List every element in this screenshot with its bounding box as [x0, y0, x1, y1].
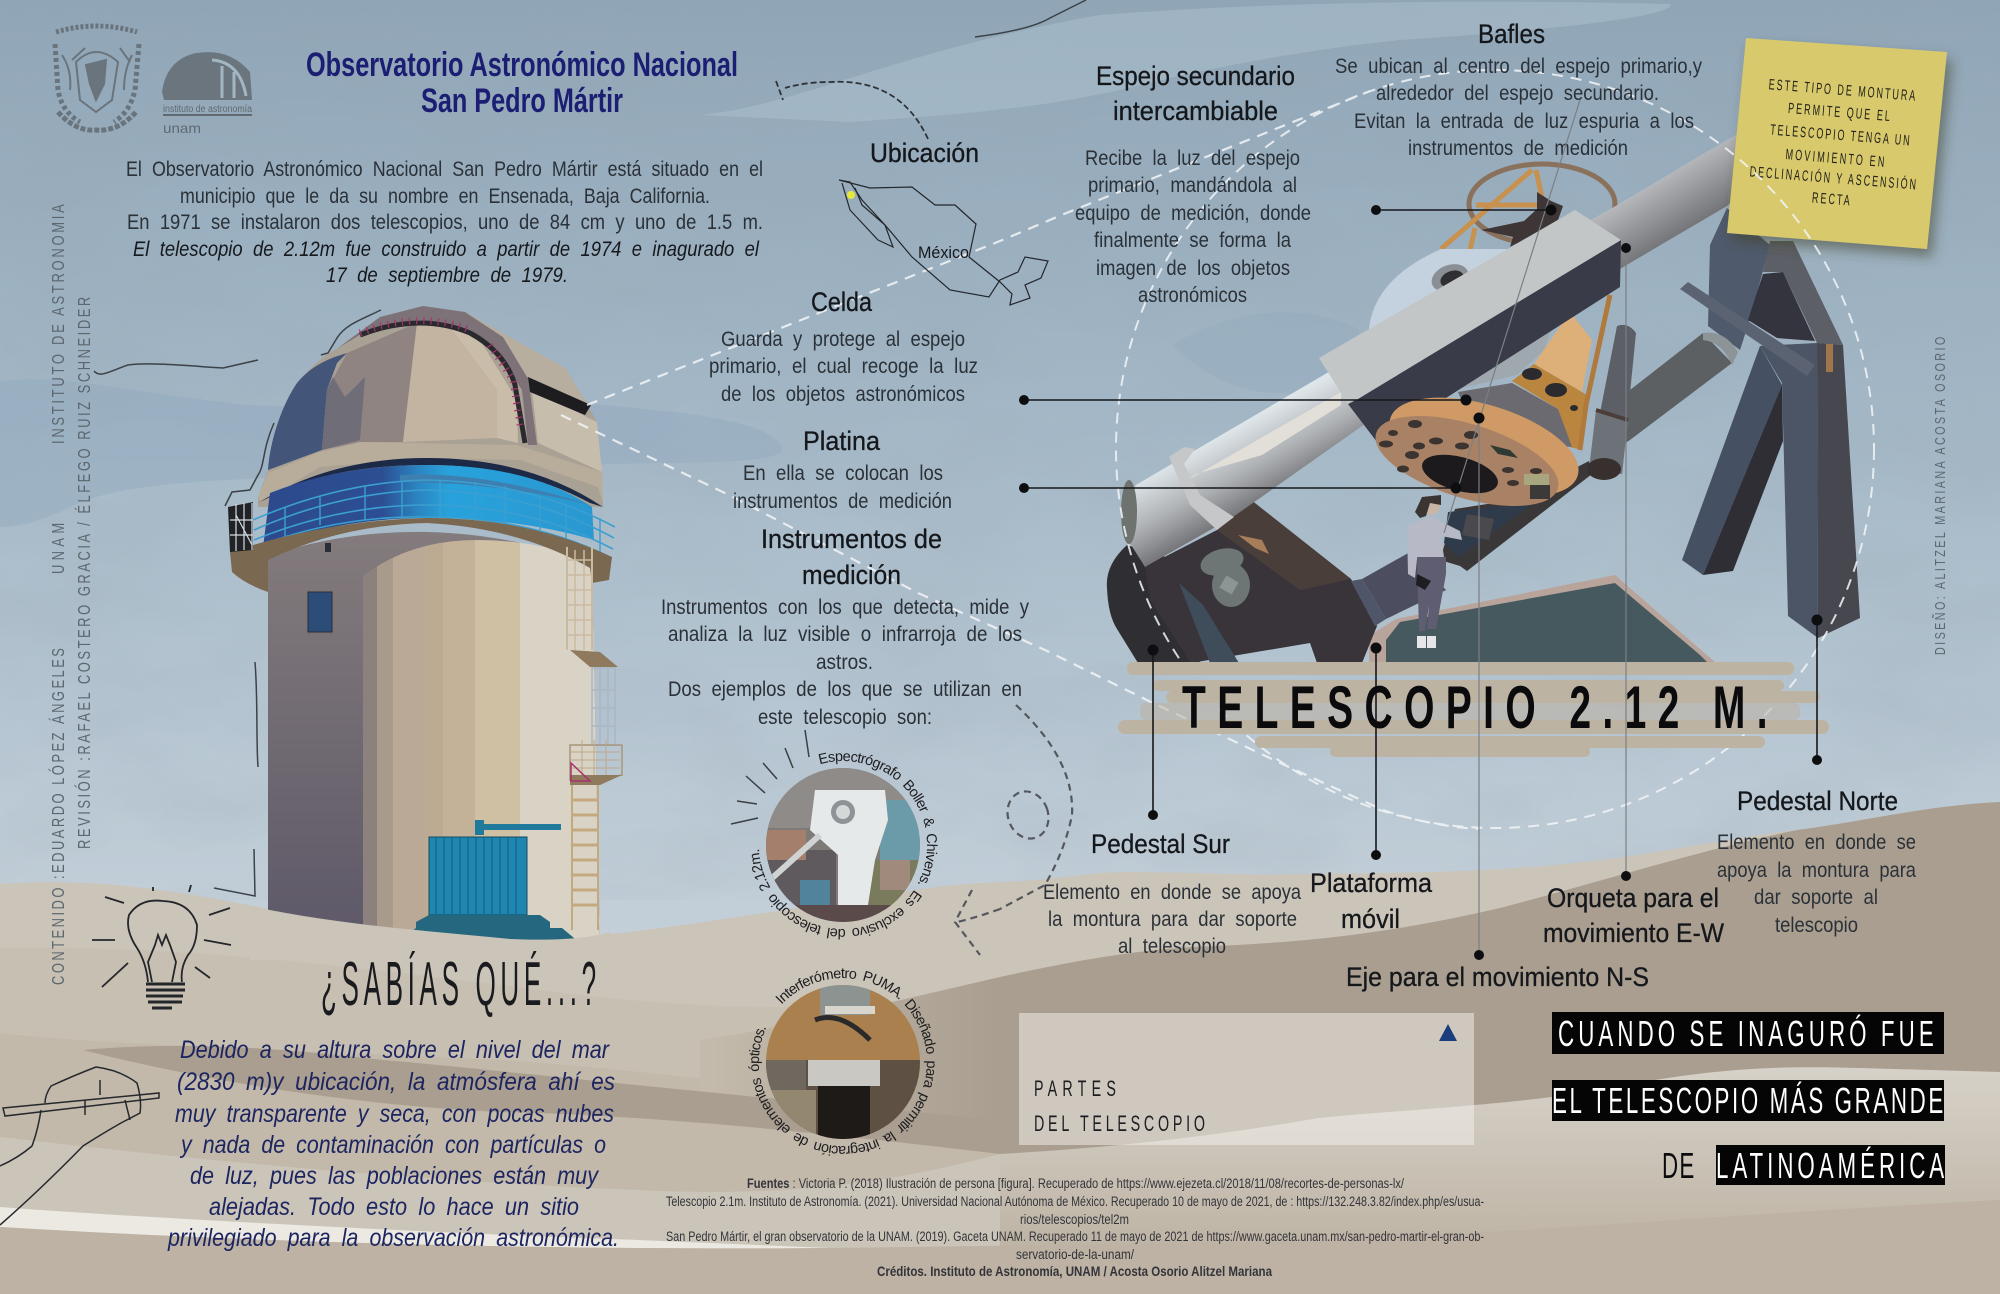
text: Pedestal Sur: Elemento en donde se apoya — [1043, 881, 1301, 904]
text: Instrumentos de medición: este telescopio son: — [758, 706, 932, 729]
callout: largest telescope: CUANDO SE INAGURÓ FUE — [1558, 1015, 1934, 1054]
dark deck — [1440, 461, 1592, 571]
vertical credits: DISEÑO: ALITZEL MARIANA ACOSTA OSORIO — [1931, 337, 1948, 655]
text: Instrumentos de medición: astros. — [816, 651, 873, 674]
south pedestal body — [1145, 500, 1377, 663]
mirror cell copper rim — [1378, 378, 1590, 516]
sources and credits: Telescopio 2.1m. Instituto de Astronomía. (2021). Universidad Nacional Autónoma de México. Recuperado 10 de mayo de 2021, de : https://132.248.3.82/index.php/es/usua- — [666, 1194, 1484, 1209]
text: Celda: Celda — [811, 287, 873, 317]
text: Orqueta — [1543, 883, 1724, 948]
note text: RECTA — [1811, 189, 1851, 209]
instrument: Espectrógrafo circle — [730, 730, 938, 940]
text: Espejo secundario: equipo de medición, donde — [1075, 202, 1311, 225]
text: Eje: Eje para el movimiento N-S — [1346, 962, 1649, 992]
text: Platina: En ella se colocan los — [743, 462, 943, 485]
text: Plataforma móvil: Plataforma — [1310, 868, 1433, 898]
mirror cell disk — [1365, 398, 1569, 524]
sources and credits — [666, 1176, 1484, 1279]
Instituto de Astronomía logo: unam — [163, 120, 201, 136]
text: Espejo secundario: intercambiable — [1113, 96, 1278, 126]
tower window — [308, 543, 332, 632]
text: Espejo secundario: imagen de los objetos — [1096, 257, 1290, 280]
text: Espejo secundario: Recibe la luz del espejo — [1085, 147, 1300, 170]
tube collar — [1169, 447, 1234, 530]
text: Pedestal Sur: Pedestal Sur — [1091, 829, 1230, 859]
text: Plataforma móvil — [1310, 868, 1433, 934]
text: Pedestal Sur — [1043, 829, 1301, 958]
text: Pedestal Sur: al telescopio — [1118, 935, 1226, 958]
mirror holes ring — [1379, 420, 1542, 486]
telescope title: TELESCOPIO 2.12 M. — [1182, 673, 1768, 741]
text: Espejo secundario: astronómicos — [1138, 284, 1247, 307]
text: Bafles: Evitan la entrada de luz espuria a los — [1354, 110, 1694, 133]
icon: light bulb — [92, 885, 231, 1008]
text: Celda — [709, 287, 978, 406]
door — [406, 820, 574, 945]
tower lit strips — [363, 530, 602, 950]
blue deck panel — [1444, 503, 1534, 557]
text: Pedestal Norte: dar soporte al — [1754, 886, 1878, 909]
heading: Sabías qué: ¿SABÍAS QUÉ...? — [321, 950, 596, 1019]
text: Plataforma móvil: móvil — [1341, 904, 1400, 934]
post-it note — [1727, 38, 1947, 249]
dashed curve and arrow — [955, 705, 1072, 955]
vertical credits: REVISIÓN :RAFAEL COSTERO GRACIA / ÉLFEGO RUIZ SCHNEIDER — [73, 297, 95, 849]
pointer lines with dots — [1019, 100, 1822, 960]
sand covering tower base — [250, 906, 610, 960]
intro text block: El Observatorio Astronómico Nacional San Pedro Mártir está situado en el — [126, 158, 763, 181]
text: Instrumentos de medición: Instrumentos con los que detecta, mide y — [661, 596, 1029, 619]
lower sphere — [1440, 300, 1551, 388]
text: Instrumentos de medición: medición — [802, 560, 901, 590]
text: Espejo secundario — [1075, 61, 1311, 307]
text: Pedestal Norte: Pedestal Norte — [1737, 786, 1898, 816]
ladder and landings — [567, 547, 622, 930]
text: Pedestal Sur: la montura para dar soporte — [1048, 908, 1297, 931]
did you know text: y nada de contaminación con partículas o — [179, 1131, 606, 1159]
shaft collar — [1703, 333, 1738, 365]
did you know text: muy transparente y seca, con pocas nubes — [175, 1100, 614, 1128]
photo: interferometer — [766, 985, 920, 1140]
legend marker — [1439, 1024, 1457, 1041]
note text: ESTE TIPO DE MONTURA — [1768, 76, 1916, 104]
intro text block: municipio que le da su nombre en Ensenada, Baja California. — [180, 185, 710, 208]
sources and credits: San Pedro Mártir, el gran observatorio de la UNAM. (2019). Gaceta UNAM. Recuperado 11 de mayo de 2021 de https://www.gaceta.unam.mx/san-pedro-martir-el-gran-ob- — [666, 1229, 1484, 1244]
north pedestal — [1682, 208, 1860, 638]
telescope illustration — [1107, 130, 1860, 663]
blue balcony — [253, 465, 615, 558]
Instituto de Astronomía logo: instituto de astronomía — [163, 104, 252, 115]
text: Espejo secundario: finalmente se forma la — [1094, 229, 1291, 252]
title: San Pedro Mártir — [421, 82, 623, 120]
orange wedge — [1534, 312, 1592, 392]
heading: Ubicación: Ubicación — [870, 138, 979, 168]
watercolor clouds — [0, 2, 1671, 527]
brush strokes behind telescope title — [1118, 662, 1829, 757]
person — [1407, 495, 1462, 648]
text: Espejo secundario: primario, mandándola al — [1088, 174, 1297, 197]
instrument box — [1524, 474, 1550, 499]
curved caption 1: Espectrógrafo Boller & Chivens. Es exclusivo del telescopio 2.12m. — [752, 752, 938, 940]
note text: PERMITE QUE EL — [1787, 100, 1891, 125]
legend box — [1019, 1013, 1474, 1145]
balcony walkway — [230, 518, 612, 592]
did you know text: alejadas. Todo esto lo hace un sitio — [209, 1193, 579, 1221]
callout: largest telescope: LATINOAMÉRICA — [1716, 1147, 1944, 1186]
text: Espejo secundario: Espejo secundario — [1096, 61, 1295, 91]
intro text block: 17 de septiembre de 1979. — [326, 264, 568, 287]
sphere ring — [1428, 259, 1472, 297]
secondary mirror ring — [1469, 164, 1615, 244]
orange truss side — [1580, 295, 1610, 450]
sources and credits: Créditos. Instituto de Astronomía, UNAM / Acosta Osorio Alitzel Mariana — [877, 1264, 1272, 1279]
text: Bafles: Se ubican al centro del espejo primario,y — [1335, 55, 1702, 78]
platform — [1369, 575, 1716, 663]
note text: MOVIMIENTO EN — [1785, 146, 1885, 170]
vertical credits: UNAM — [49, 523, 69, 574]
callout: largest telescope: DE — [1662, 1147, 1694, 1186]
intro text block: En 1971 se instalaron dos telescopios, uno de 84 cm y uno de 1.5 m. — [127, 211, 763, 234]
legend box: PARTES — [1034, 1076, 1116, 1101]
vertical credits: CONTENIDO :EDUARDO LÓPEZ ÁNGELES — [47, 648, 69, 985]
horizontal shaft — [1618, 333, 1732, 448]
box beam side — [1348, 240, 1621, 442]
orange plate — [1512, 364, 1587, 450]
intro text block: El telescopio de 2.12m fue construido a partir de 1974 e inagurado el — [133, 238, 760, 261]
text: Instrumentos de medición — [661, 524, 1029, 729]
location marker — [847, 191, 855, 199]
text: Pedestal Norte: telescopio — [1775, 914, 1858, 937]
intro text block — [126, 158, 763, 287]
dashed connector lines — [561, 70, 1874, 829]
icon: hand with pencil — [0, 1067, 159, 1225]
sources and credits: rios/telescopios/tel2m — [1020, 1212, 1129, 1227]
Instituto de Astronomía logo — [162, 52, 252, 136]
shaft rod — [1680, 282, 1815, 376]
text: Celda: Guarda y protege al espejo — [721, 328, 965, 351]
tower wall — [268, 532, 600, 945]
chrome mirror housing — [1458, 383, 1572, 447]
main tube — [1121, 130, 1745, 567]
did you know text: (2830 m)y ubicación, la atmósfera ahí es — [177, 1068, 615, 1096]
desert sand layers — [0, 802, 2000, 1294]
text: Bafles: instrumentos de medición — [1408, 137, 1628, 160]
text: Instrumentos de medición: Instrumentos de — [761, 524, 942, 554]
secondary mirror mount — [1481, 192, 1563, 247]
did you know text — [167, 1036, 619, 1252]
text: Bafles: Bafles — [1478, 19, 1545, 49]
location dashed arrow — [776, 81, 928, 139]
sources and credits: Fuentes : Victoria P. (2018) Ilustración de persona [figura]. Recuperado de https://www.ejezeta.cl/2018/11/08/recortes-de-personas-lx/ — [747, 1176, 1404, 1191]
observatory tower illustration — [228, 306, 622, 950]
note text: TELESCOPIO TENGA UN — [1770, 121, 1910, 149]
deck square — [1462, 514, 1494, 540]
note text — [1749, 76, 1917, 209]
left access platform — [228, 502, 253, 552]
title — [306, 46, 738, 120]
vertical credits: INSTITUTO DE ASTRONOMIA — [49, 204, 69, 444]
map of Mexico — [839, 180, 1048, 305]
lower tube — [1351, 552, 1446, 626]
sources and credits: servatorio-de-la-unam/ — [1016, 1247, 1134, 1262]
text: Orqueta: Orqueta para el — [1547, 883, 1719, 913]
white-blue sphere — [1369, 240, 1540, 340]
small cylinder — [1587, 325, 1636, 480]
title: Observatorio Astronómico Nacional — [306, 46, 738, 84]
did you know text: Debido a su altura sobre el nivel del mar — [180, 1036, 610, 1064]
south pedestal back — [1107, 545, 1200, 663]
instrument: Interferómetro circle — [748, 968, 936, 1156]
text: Bafles — [1335, 19, 1702, 160]
note text: DECLINACIÓN Y ASCENSIÓN — [1749, 162, 1917, 193]
text: Instrumentos de medición: Dos ejemplos de los que se utilizan en — [668, 678, 1022, 701]
text: Orqueta: movimiento E-W — [1543, 918, 1724, 948]
truss struts — [1441, 170, 1548, 250]
vertical credits — [47, 204, 1948, 985]
did you know text: privilegiado para la observación astronómica. — [167, 1224, 619, 1252]
text: Bafles: alrededor del espejo secundario. — [1376, 82, 1659, 105]
light ticks — [731, 730, 809, 824]
curved caption 2: Interferómetro PUMA. Diseñado para permitir la integración de elementos ópticos. — [748, 968, 936, 1156]
paper texture — [0, 0, 2000, 900]
text: Celda: de los objetos astronómicos — [721, 383, 965, 406]
photo: spectrograph — [766, 768, 920, 925]
text: Instrumentos de medición: analiza la luz visible o infrarroja de los — [668, 623, 1022, 646]
did you know text: de luz, pues las poblaciones están muy — [190, 1162, 599, 1190]
callout: largest telescope: EL TELESCOPIO MÁS GRANDE — [1552, 1082, 1943, 1121]
text: Platina — [733, 426, 952, 513]
text: Platina: instrumentos de medición — [733, 490, 952, 513]
mirror hole — [1418, 447, 1502, 501]
text: Platina: Platina — [803, 426, 881, 456]
map label: México — [918, 243, 969, 262]
dome — [258, 306, 603, 507]
text: Pedestal Norte: Elemento en donde se — [1717, 831, 1916, 854]
text: Pedestal Norte: apoya la montura para — [1717, 859, 1916, 882]
UNAM crest logo — [55, 26, 139, 130]
decorative ink squiggles — [94, 0, 1086, 896]
callout: largest telescope — [1552, 1012, 1945, 1186]
text: Pedestal Norte — [1717, 786, 1916, 937]
box beam top — [1319, 210, 1621, 404]
text: Celda: primario, el cual recoge la luz — [709, 355, 978, 378]
legend box: DEL TELESCOPIO — [1034, 1111, 1205, 1136]
